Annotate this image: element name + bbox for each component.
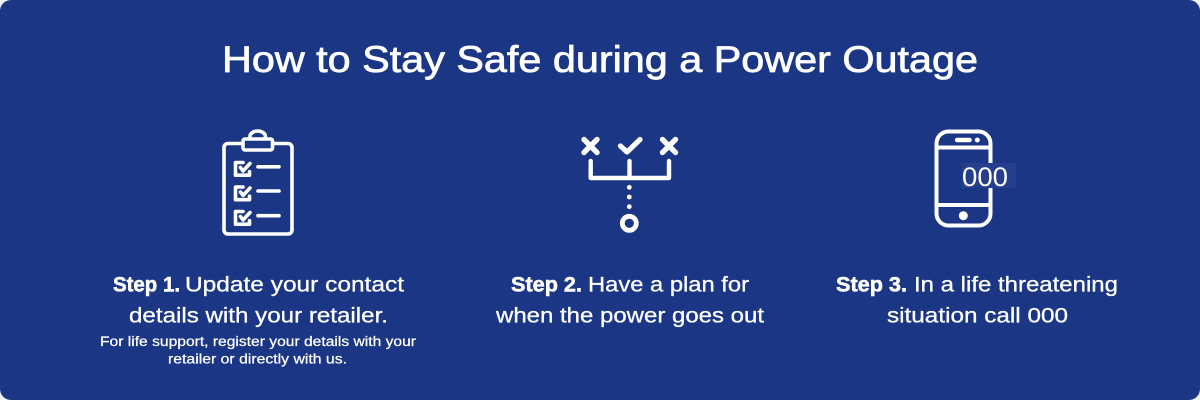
step 1 text: retailer or directly with us. [168,352,347,366]
emergency number label: 000 [962,162,1008,192]
step 1 text [100,272,417,366]
step 3 text: In a life threatening [914,272,1118,296]
step 3 text [836,272,1118,328]
icon: decision plan [584,140,676,230]
step 1 text: For life support, register your details with your [100,334,417,349]
step 3 text: Step 3. [836,272,907,296]
step 1 text: Update your contact [185,272,404,296]
step 2 text: Step 2. [511,272,582,296]
step 2 text: Have a plan for [588,272,749,296]
step 2 text: when the power goes out [495,304,764,328]
title: How to Stay Safe during a Power Outage [222,38,978,80]
step 2 text [495,272,764,328]
step 1 text: details with your retailer. [129,304,388,328]
icon: phone [936,132,990,226]
icon: clipboard checklist [224,131,292,234]
step 3 text: situation call 000 [887,304,1068,328]
step 1 text: Step 1. [113,272,180,296]
